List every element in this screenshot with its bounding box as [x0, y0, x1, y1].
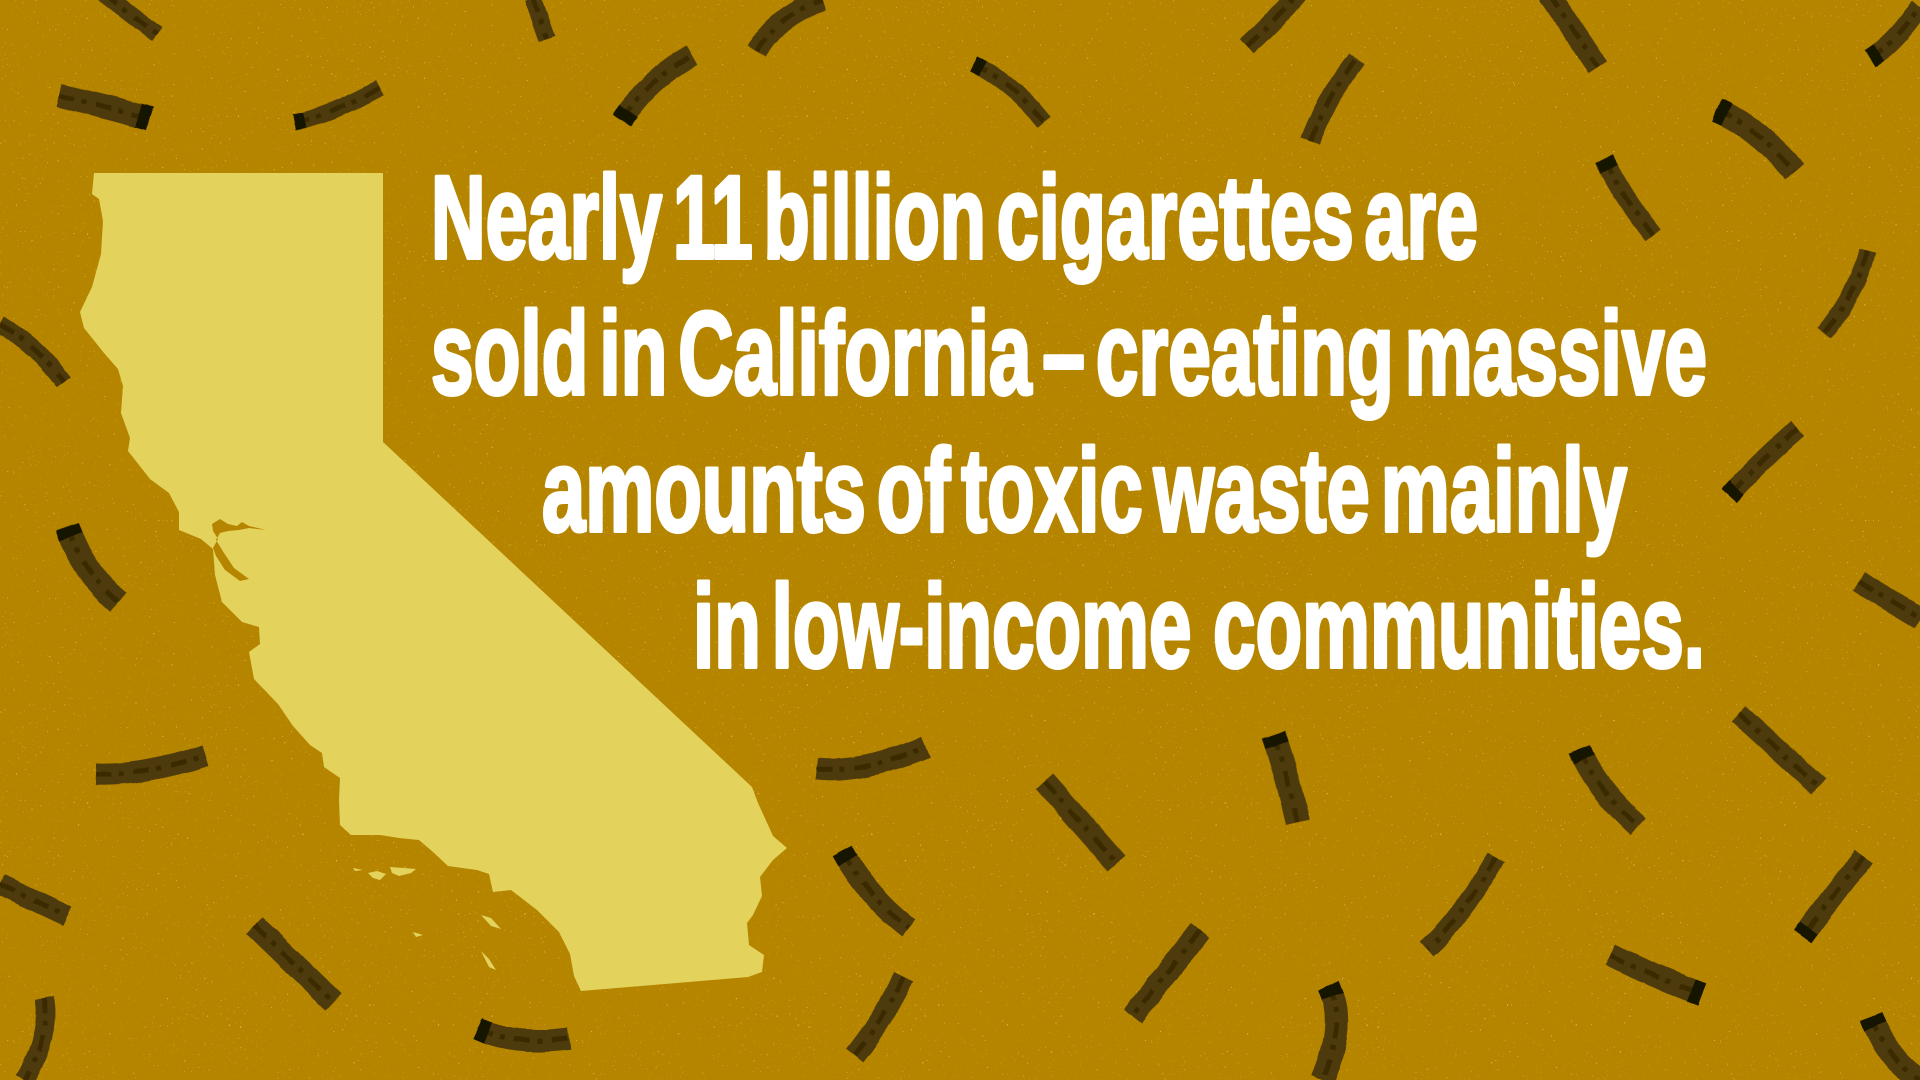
icon: cigarette butt 6: [757, 0, 823, 51]
icon: cigarette butt 14: [1824, 251, 1867, 333]
state silhouette: [80, 173, 787, 991]
Channel Islands: [353, 867, 501, 970]
icon: cigarette butt 29: [478, 1029, 569, 1041]
icon: cigarette butt 7: [973, 64, 1044, 122]
icon: cigarette butt 9: [1310, 59, 1357, 141]
icon: cigarette butt 26: [842, 851, 909, 928]
icon: cigarette butt 5: [622, 55, 692, 120]
icon: cigarette butt 2: [59, 96, 149, 119]
icon: cigarette butt 27: [255, 926, 333, 1002]
icon: cigarette butt 20: [817, 747, 926, 770]
icon: cigarette butt 15: [0, 324, 64, 382]
icon: cigarette butt 3: [294, 88, 380, 122]
icon: cigarette butt 36: [1871, 1016, 1920, 1080]
icon: cigarette butt 31: [1133, 931, 1200, 1016]
icon: cigarette butt 21: [1044, 781, 1117, 863]
icon: cigarette butt 18: [1859, 582, 1920, 618]
San Francisco Bay: [212, 519, 266, 581]
icon: cigarette butt 28: [24, 998, 46, 1080]
icon: cigarette butt 32: [1427, 857, 1496, 949]
icon: cigarette butt 13: [1604, 159, 1653, 235]
icon: cigarette butt 23: [1580, 749, 1638, 827]
icon: cigarette butt 34: [1610, 955, 1702, 994]
icon: cigarette butt 30: [855, 977, 904, 1056]
icon: cigarette butt 1: [104, 0, 157, 34]
icon: cigarette butt 25: [0, 884, 67, 916]
icon: cigarette butt 4: [533, 0, 547, 39]
icon: cigarette butt 10: [1549, 0, 1598, 67]
icon: cigarette butt 12: [1717, 110, 1795, 171]
icon: cigarette butt 16: [1729, 429, 1798, 496]
icon: cigarette butt 22: [1273, 735, 1298, 823]
icon: cigarette butt 35: [1802, 857, 1864, 937]
icon: cigarette butt 8: [1247, 0, 1298, 47]
icon: cigarette butt 24: [1739, 714, 1818, 786]
icon: cigarette butt 33: [1322, 986, 1336, 1080]
icon: cigarette butt 11: [1870, 6, 1920, 59]
icon: cigarette butt 19: [96, 756, 206, 774]
icon: cigarette butt 17: [67, 527, 119, 602]
